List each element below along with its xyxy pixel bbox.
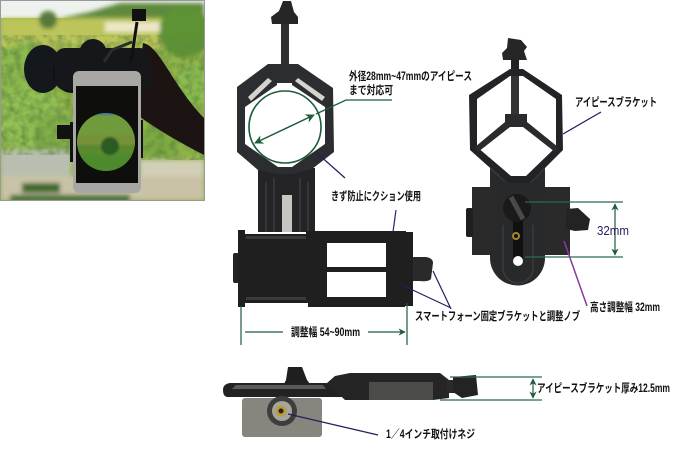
photo: phone mounted on binoculars bbox=[0, 1, 215, 201]
label: supported up to: まで対応可 bbox=[349, 83, 393, 97]
back view of mount bbox=[466, 38, 590, 286]
label: width adjustment: 調整幅 54~90mm bbox=[291, 325, 360, 339]
label: eyepiece diameter: 外径28mm~47mmのアイピース bbox=[349, 69, 472, 83]
side knobs bbox=[466, 208, 590, 237]
bracket side bbox=[327, 373, 449, 400]
eyepiece bracket: hexagon frame bbox=[237, 64, 334, 174]
bottom knob bbox=[284, 367, 310, 384]
phone bbox=[57, 71, 143, 193]
stem bbox=[258, 168, 315, 232]
lock knob bbox=[503, 194, 531, 222]
plate bbox=[242, 398, 322, 437]
clamp plate bbox=[472, 187, 570, 255]
label: mounting screw: 1／4インチ取付けネジ bbox=[386, 427, 475, 441]
phone clamp bbox=[233, 230, 433, 307]
arm bbox=[223, 383, 347, 397]
top knob and rod bbox=[502, 38, 527, 115]
label: cushion: きず防止にクション使用 bbox=[331, 189, 421, 203]
top knob and screw bbox=[271, 1, 298, 64]
label: height adjustment: 高さ調整幅 32mm bbox=[590, 300, 660, 314]
inner V-bracket bbox=[475, 114, 558, 152]
bottom view of mount bbox=[223, 367, 478, 437]
front view of mount with phone bracket bbox=[233, 1, 433, 307]
annotation lines bbox=[241, 100, 623, 435]
label: smartphone bracket and knob: スマートフォーン固定ブラケットと調整ノブ bbox=[415, 309, 580, 323]
label: 32mm dimension: 32mm bbox=[597, 223, 629, 238]
green diameter circle bbox=[249, 91, 321, 163]
binoculars and hand bbox=[24, 9, 204, 155]
back stem bbox=[490, 168, 545, 286]
photo border bbox=[0, 0, 204, 200]
mounting screw bbox=[267, 396, 297, 426]
hexagon frame bbox=[469, 69, 563, 183]
slot and tripod screw bbox=[503, 216, 533, 283]
foliage texture bbox=[1, 35, 204, 165]
